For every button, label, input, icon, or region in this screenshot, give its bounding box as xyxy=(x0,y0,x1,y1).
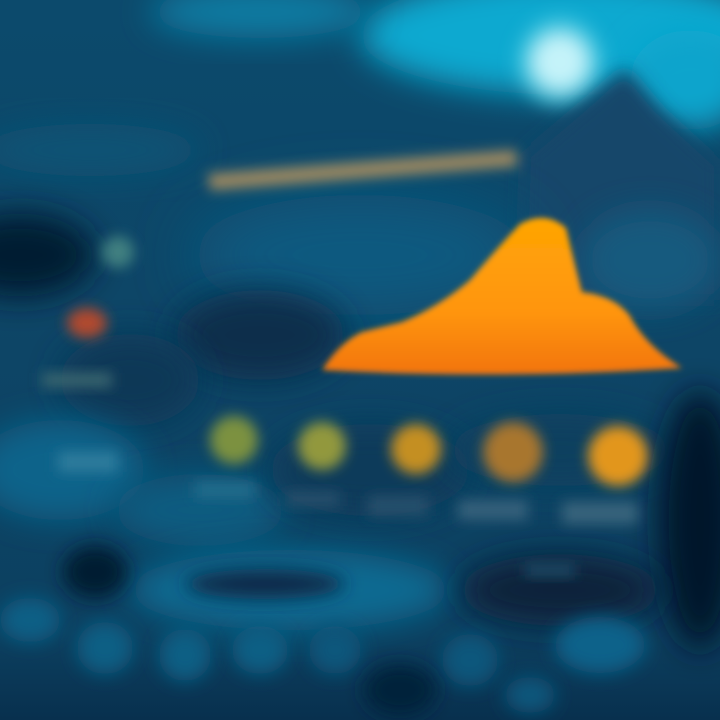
icon: moon xyxy=(518,18,602,106)
title xyxy=(208,150,518,190)
text block: left label xyxy=(42,373,112,387)
icon: green marker xyxy=(102,236,134,268)
caption 6 xyxy=(525,564,575,576)
left column: small markers xyxy=(42,236,134,472)
area chart: orange peak xyxy=(322,218,682,375)
caption 1 xyxy=(195,482,255,498)
caption 2 xyxy=(285,492,340,506)
caption 3 xyxy=(368,496,428,516)
circle 2 xyxy=(298,422,346,470)
circle captions xyxy=(195,482,638,576)
circle row xyxy=(210,416,648,486)
caption 4 xyxy=(458,500,528,520)
circle 3 xyxy=(391,424,441,474)
icon: red marker xyxy=(67,308,107,338)
text block: lower left label xyxy=(58,452,118,472)
background: foreground hills xyxy=(0,546,660,716)
circle 4 xyxy=(483,422,543,482)
circle 5 xyxy=(588,426,648,486)
circle 1 xyxy=(210,416,258,464)
caption 5 xyxy=(562,502,638,524)
